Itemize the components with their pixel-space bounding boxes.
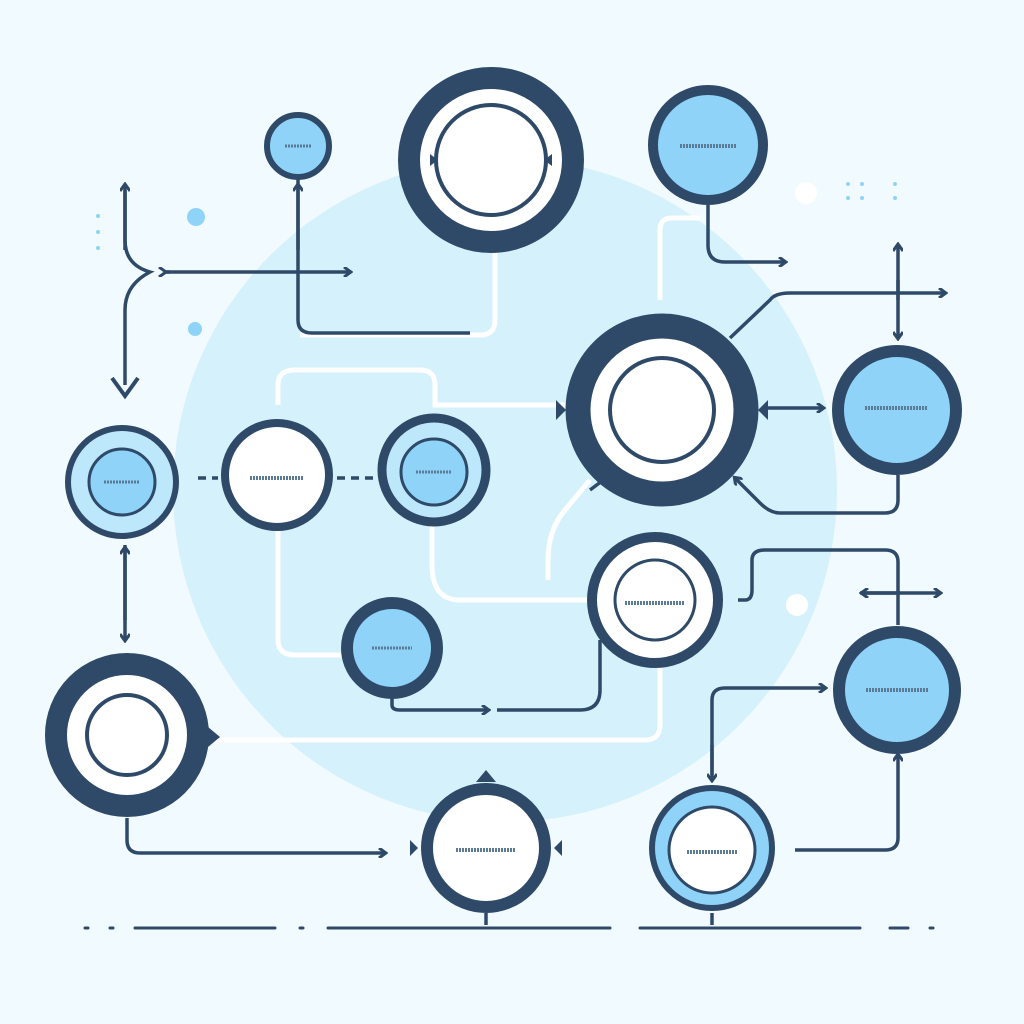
node 9 [592,537,718,663]
dark connectors [125,178,945,925]
node 1 [267,115,329,177]
node 8 [382,418,486,522]
node 10 [347,603,437,693]
node 4 [556,326,768,494]
decorative dots [96,182,897,336]
node 7 [225,423,329,527]
white connector paths [210,218,700,740]
node 12 [839,632,955,748]
node 6 [68,428,176,536]
node 2 [409,77,573,243]
node 5 [838,351,956,469]
node 13 [410,770,562,907]
node 11 [56,664,220,806]
node 3 [653,90,763,200]
node 14 [652,788,772,908]
background circle [173,158,837,822]
bottom dashed baseline [85,926,933,930]
arrow: big down arrow left [112,378,138,396]
